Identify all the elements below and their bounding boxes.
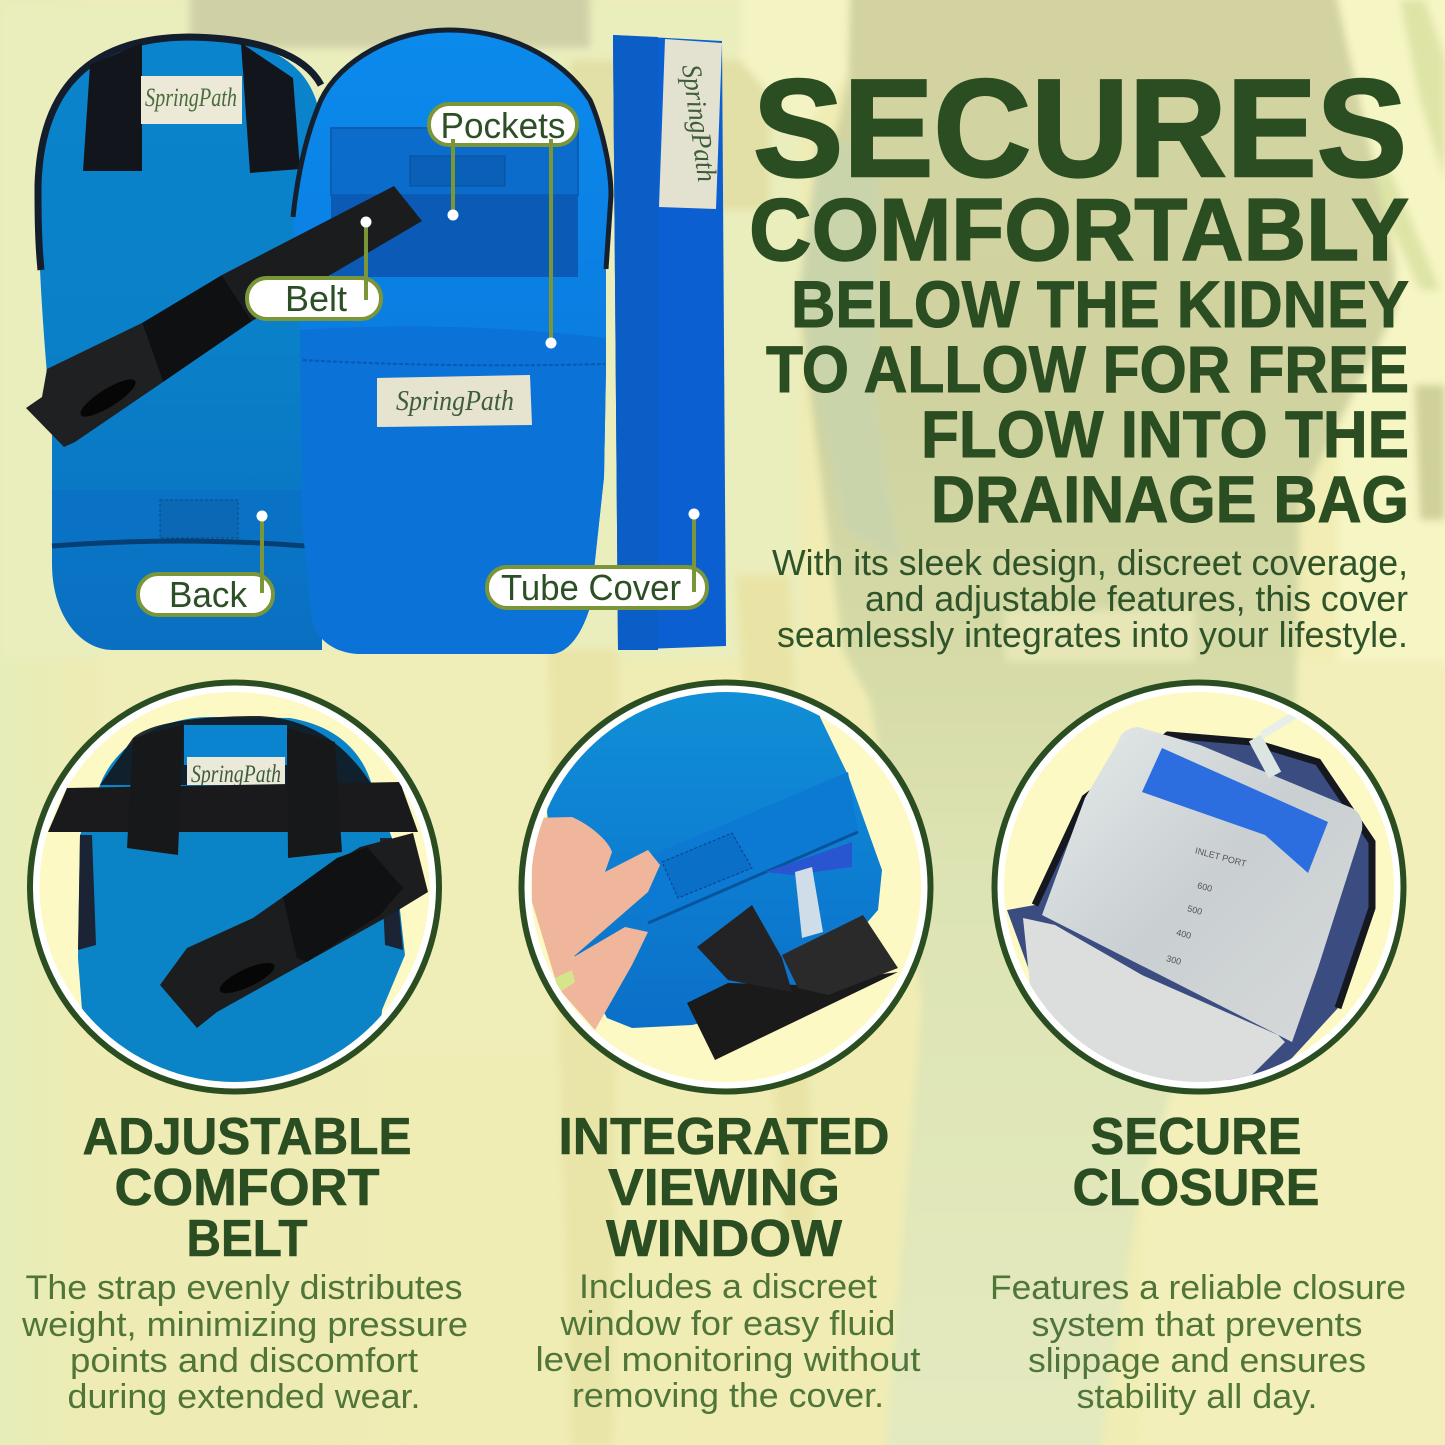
brand label: SpringPath — [396, 385, 514, 417]
feature: adjustable comfort belt: ADJUSTABLE — [82, 1108, 412, 1166]
title: FLOW INTO THE — [921, 397, 1409, 471]
feature: integrated viewing window: VIEWING — [608, 1159, 840, 1217]
feature: integrated viewing window: WINDOW — [606, 1210, 843, 1268]
label: belt — [247, 216, 381, 319]
pocket tab — [160, 500, 238, 538]
feature: secure closure: SECURE — [1090, 1108, 1302, 1166]
intro text: seamlessly integrates into your lifestyle. — [777, 614, 1408, 655]
circle: secure closure: 300 — [1165, 953, 1182, 967]
label: back: Back — [169, 574, 248, 615]
front flap — [300, 326, 606, 654]
feature: secure closure: system that prevents — [1032, 1306, 1362, 1344]
feature: adjustable comfort belt: The strap evenly distributes — [26, 1269, 462, 1307]
feature: secure closure: stability all day. — [1076, 1378, 1318, 1416]
brand label — [659, 39, 722, 209]
feature: secure closure: slippage and ensures — [1028, 1342, 1366, 1380]
brand label: SpringPath — [145, 83, 237, 112]
intro text: and adjustable features, this cover — [865, 578, 1408, 619]
feature: adjustable comfort belt: weight, minimizing pressure — [21, 1306, 468, 1344]
circle: adjustable belt: SpringPath — [191, 761, 281, 788]
brand label — [377, 375, 532, 427]
title: SECURES — [753, 51, 1407, 206]
feature: adjustable comfort belt: during extended wear. — [68, 1378, 420, 1416]
feature: integrated viewing window: removing the cover. — [572, 1377, 884, 1415]
feature: adjustable comfort belt: points and discomfort — [70, 1342, 419, 1380]
feature: integrated viewing window: level monitoring without — [536, 1341, 921, 1379]
label: tube cover: Tube Cover — [501, 567, 681, 608]
feature: secure closure: CLOSURE — [1072, 1159, 1320, 1217]
product: tube cover — [613, 35, 726, 650]
title — [749, 51, 1409, 536]
circle: secure closure: 400 — [1175, 927, 1192, 941]
label: pockets: Pockets — [440, 105, 566, 146]
product: front of pouch — [293, 30, 611, 654]
brand label: SpringPath — [675, 63, 722, 184]
webbing straps — [83, 43, 142, 171]
label: belt: Belt — [285, 278, 347, 319]
label: pockets — [429, 104, 577, 348]
label: back — [138, 510, 273, 615]
product: belt and buckle — [26, 186, 422, 447]
circle: secure closure — [994, 682, 1404, 1100]
title: BELOW THE KIDNEY — [791, 267, 1409, 341]
title: DRAINAGE BAG — [931, 462, 1409, 536]
intro text: With its sleek design, discreet coverage, — [772, 542, 1408, 583]
feature: secure closure: Features a reliable closure — [990, 1269, 1406, 1307]
circle: secure closure: 600 — [1196, 880, 1213, 894]
feature: adjustable comfort belt — [21, 1108, 468, 1416]
feature: adjustable comfort belt: BELT — [186, 1210, 308, 1268]
product: back of pouch — [38, 37, 322, 650]
circle: adjustable belt — [30, 682, 439, 1092]
inner pocket window — [331, 128, 578, 195]
circle: viewing window — [522, 680, 930, 1092]
feature: secure closure — [990, 1108, 1406, 1416]
label: tube cover — [487, 508, 707, 608]
feature: integrated viewing window: Includes a discreet — [579, 1268, 878, 1306]
circle: secure closure: INLET PORT — [1194, 845, 1248, 869]
brand label — [141, 76, 242, 124]
intro text — [772, 542, 1408, 655]
feature: integrated viewing window: INTEGRATED — [558, 1108, 890, 1166]
feature: adjustable comfort belt: COMFORT — [114, 1159, 380, 1217]
circle: secure closure: 500 — [1186, 903, 1203, 917]
title: COMFORTABLY — [749, 180, 1409, 279]
feature: integrated viewing window — [536, 1108, 921, 1415]
feature: integrated viewing window: window for easy fluid — [559, 1305, 896, 1343]
